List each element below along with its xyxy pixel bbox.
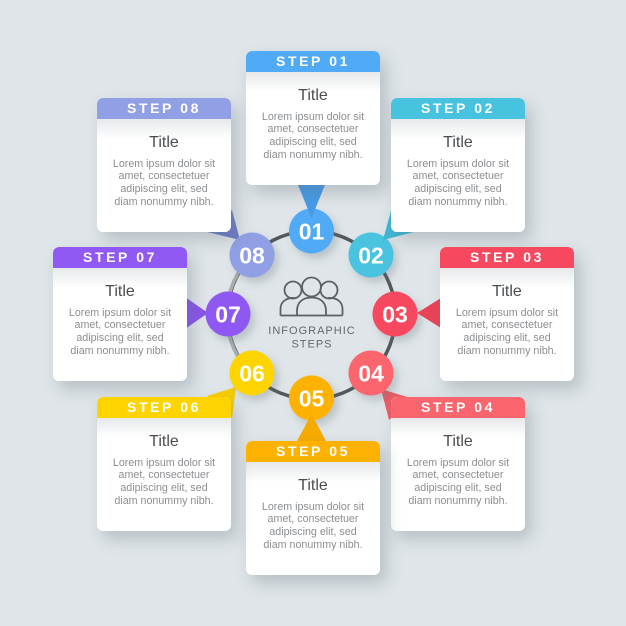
card: step 02 <box>391 98 525 232</box>
card: step 06: Title <box>149 433 179 450</box>
step 05 node <box>289 376 334 443</box>
card: step 01: Title <box>298 87 328 104</box>
card: step 08: diam nonummy nibh. <box>114 196 214 208</box>
card: step 04: amet, consectetuer <box>413 469 503 481</box>
card: step 08 <box>97 98 231 232</box>
card: step 03: Title <box>492 283 522 300</box>
card: step 04: Lorem ipsum dolor sit <box>407 456 509 468</box>
step 08 node <box>207 210 274 278</box>
card: step 08: Lorem ipsum dolor sit <box>113 158 215 170</box>
card: step 08: adipiscing elit, sed <box>120 183 208 195</box>
card: step 07: STEP 07 <box>83 249 157 265</box>
card: step 01 <box>246 51 380 185</box>
card: step 01: adipiscing elit, sed <box>269 136 357 148</box>
card: step 07: Title <box>105 283 135 300</box>
card: step 07: Lorem ipsum dolor sit <box>69 306 171 318</box>
step 04 node: 04 <box>358 360 384 386</box>
step 02 node: 02 <box>358 242 384 268</box>
card: step 02: adipiscing elit, sed <box>414 183 502 195</box>
card: step 05: adipiscing elit, sed <box>269 526 357 538</box>
step 06 node <box>207 350 274 418</box>
card: step 01: STEP 01 <box>276 53 350 69</box>
center label <box>268 325 356 350</box>
card: step 03: adipiscing elit, sed <box>463 332 551 344</box>
card: step 01: Lorem ipsum dolor sit <box>262 110 364 122</box>
card: step 03 <box>440 247 574 381</box>
card: step 01: amet, consectetuer <box>268 123 358 135</box>
step 01 node <box>289 180 334 254</box>
card: step 02: STEP 02 <box>421 100 495 116</box>
card: step 07: diam nonummy nibh. <box>70 345 170 357</box>
card: step 05 <box>246 441 380 575</box>
step 01 node: 01 <box>299 218 324 244</box>
card: step 04: diam nonummy nibh. <box>408 495 508 507</box>
card: step 06: Lorem ipsum dolor sit <box>113 456 215 468</box>
card: step 06: STEP 06 <box>127 399 201 415</box>
card: step 03: diam nonummy nibh. <box>457 345 557 357</box>
center label: INFOGRAPHIC <box>268 325 356 337</box>
card: step 02: Title <box>443 134 473 151</box>
card: step 06: amet, consectetuer <box>119 469 209 481</box>
step 07 node: 07 <box>215 302 241 328</box>
card: step 05: Lorem ipsum dolor sit <box>262 500 364 512</box>
step 05 node: 05 <box>299 386 324 412</box>
center label: STEPS <box>291 338 333 350</box>
card: step 02: Lorem ipsum dolor sit <box>407 158 509 170</box>
step 02 node <box>348 207 414 278</box>
card: step 03: amet, consectetuer <box>462 319 552 331</box>
card: step 08: amet, consectetuer <box>119 170 209 182</box>
card: step 08: STEP 08 <box>127 100 201 116</box>
card: step 01: diam nonummy nibh. <box>263 149 363 161</box>
card: step 05: Title <box>298 477 328 494</box>
ring <box>227 231 396 399</box>
step 07 node <box>185 292 250 336</box>
card: step 04 <box>391 397 525 531</box>
step 06 node: 06 <box>239 360 265 386</box>
card: step 05: STEP 05 <box>276 443 350 459</box>
step 08 node: 08 <box>239 242 265 268</box>
card: step 07: amet, consectetuer <box>75 319 165 331</box>
step 04 node <box>348 350 414 420</box>
card: step 04: STEP 04 <box>421 399 495 415</box>
card: step 02: diam nonummy nibh. <box>408 196 508 208</box>
card: step 07: adipiscing elit, sed <box>76 332 164 344</box>
card: step 02: amet, consectetuer <box>413 170 503 182</box>
icon: people group <box>280 278 342 316</box>
card: step 04: Title <box>443 433 473 450</box>
step 03 node: 03 <box>382 302 408 328</box>
card: step 03: Lorem ipsum dolor sit <box>456 306 558 318</box>
step 03 node <box>372 292 441 336</box>
card: step 08: Title <box>149 134 179 151</box>
card: step 05: amet, consectetuer <box>268 513 358 525</box>
card: step 03: STEP 03 <box>470 249 544 265</box>
card: step 07 <box>53 247 187 381</box>
card: step 06: adipiscing elit, sed <box>120 482 208 494</box>
card: step 06: diam nonummy nibh. <box>114 495 214 507</box>
card: step 06 <box>97 397 231 531</box>
card: step 04: adipiscing elit, sed <box>414 482 502 494</box>
card: step 05: diam nonummy nibh. <box>263 539 363 551</box>
